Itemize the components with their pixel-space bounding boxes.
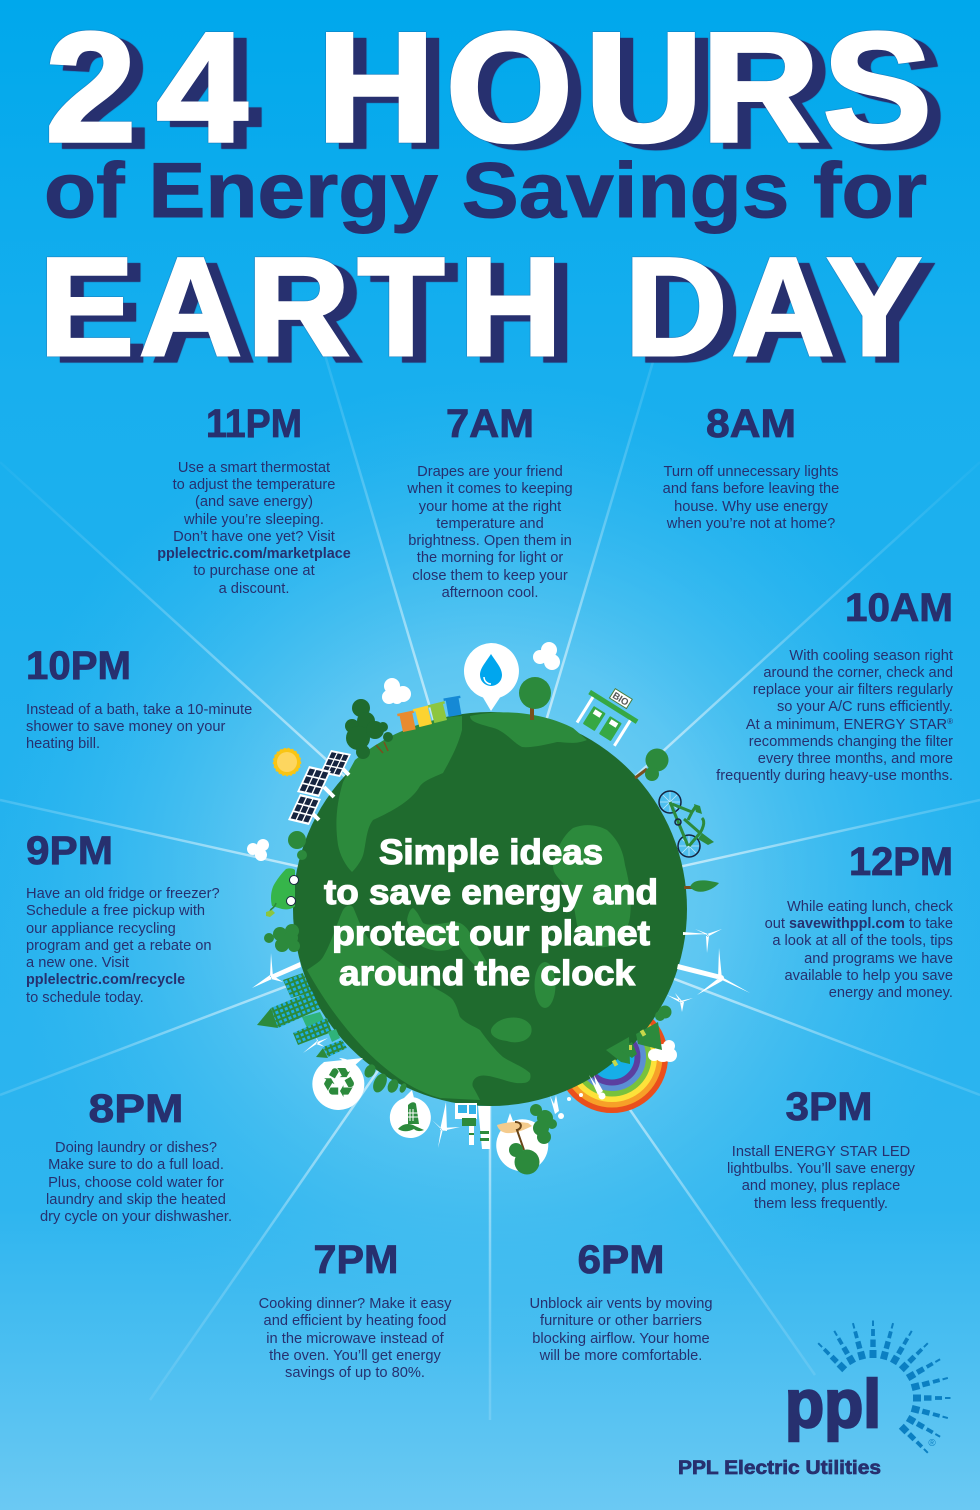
globe headline: Simple ideas [379,833,603,872]
tip: 10AM [716,586,954,784]
tip: 7AM: afternoon cool. [442,585,538,601]
tip: 9PM: a new one. Visit [26,955,129,971]
tip: 3PM: lightbulbs. You’ll save energy [727,1161,916,1177]
tip: 10AM: recommends changing the filter [749,734,953,750]
tip: 7AM: when it comes to keeping [406,481,573,497]
logo wordmark: ppl [785,1366,881,1442]
tip: 11PM: a discount. [219,581,289,597]
tip: 9PM: to schedule today. [26,990,144,1006]
tip: 7AM: Drapes are your friend [417,464,563,480]
tip: 7PM [259,1238,452,1381]
title line: 24 HOURS: 24 HOURS [45,0,932,174]
tip: 9PM: pplelectric.com/recycle [26,972,185,988]
tip: 10PM: 10PM [26,644,131,688]
tip: 12PM: and programs we have [804,951,953,967]
tip: 12PM: 12PM [849,840,953,884]
icon: recycle bubble [312,1058,364,1110]
tip: 6PM: furniture or other barriers [540,1313,702,1329]
tip: 7PM: in the microwave instead of [266,1331,445,1347]
tip: 9PM: Schedule a free pickup with [26,903,205,919]
tip: 9PM: Have an old fridge or freezer? [26,886,220,902]
tip: 9PM: our appliance recycling [26,921,176,937]
title line: of Energy Savings for: of Energy Savings for [44,146,927,234]
tip: 11PM: pplelectric.com/marketplace [157,546,351,562]
sun rays [0,355,980,1420]
globe headline: to save energy and [324,873,658,912]
tip: 11PM: to purchase one at [193,563,315,579]
tip: 8PM: Plus, choose cold water for [48,1175,224,1191]
tip: 7PM: and efficient by heating food [264,1313,446,1329]
icon: electric car [266,868,298,917]
icon: dark tree cluster [345,699,393,759]
tip: 8PM [40,1087,232,1225]
islands [491,962,556,1042]
tip: 10PM: Instead of a bath, take a 10-minute [26,702,252,718]
title line: EARTH DAY: EARTH DAY [39,228,922,385]
icon: factory [455,1103,490,1149]
tip: 3PM: them less frequently. [754,1196,888,1212]
tip: 6PM: 6PM [578,1238,664,1282]
tip: 6PM: Unblock air vents by moving [529,1296,713,1312]
tip: 7AM: brightness. Open them in [408,533,572,549]
icon: tree [519,677,551,720]
tip: 8AM [663,402,839,532]
tip: 11PM: (and save energy) [195,494,313,510]
tip: 7AM: 7AM [446,402,534,446]
logo sunburst [816,1320,950,1455]
icon: solar panels [288,750,351,825]
icon: leaf [684,880,719,892]
tip: 7PM: the oven. You’ll get energy [269,1348,442,1364]
icon: water bubble [464,643,519,711]
globe headline [324,833,658,993]
logo: PPL Electric Utilities [678,1320,950,1479]
tip: 7AM: your home at the right [419,499,561,515]
tip: 10PM [26,644,252,752]
tip: 12PM: While eating lunch, check [787,899,954,915]
tip: 12PM [765,840,954,1001]
icon: wind turbines east [667,929,750,1012]
tip: 10AM: so your A/C runs efficiently. [777,699,953,715]
icon: recycle bubble: ♻ [321,1059,357,1107]
icon: wind turbines west [252,953,328,1053]
tip: 3PM: 3PM [786,1085,872,1129]
tip: 12PM: a look at all of the tools, tips [772,933,953,949]
tip: 8AM: house. Why use energy [674,499,829,515]
tip: 8AM: and fans before leaving the [663,481,839,497]
tip: 11PM: 11PM [206,402,302,446]
icon: bulb bubble [390,1090,431,1138]
icon: bio fuel station: BIO [610,690,630,709]
tip: 12PM: available to help you save [785,968,953,984]
tip: 7AM: the morning for light or [417,550,563,566]
title [39,0,932,385]
tip: 7PM: Cooking dinner? Make it easy [259,1296,452,1312]
logo caption: PPL Electric Utilities [678,1458,881,1479]
tip: 8PM: dry cycle on your dishwasher. [40,1209,232,1225]
tip: 12PM: energy and money. [829,985,953,1001]
tip: 8PM: laundry and skip the heated [46,1192,226,1208]
tip: 11PM: to adjust the temperature [173,477,335,493]
tip: 7PM: 7PM [314,1238,398,1282]
tip: 8PM: Doing laundry or dishes? [55,1140,217,1156]
tip: 11PM: Use a smart thermostat [178,460,330,476]
icon: small trees west [288,831,307,860]
continent: north [470,712,587,747]
icon: leaves [362,1062,408,1095]
tip: 8PM: 8PM [88,1087,184,1131]
tip: 8AM: when you’re not at home? [666,516,835,532]
tip: 8AM: 8AM [706,402,796,446]
tip: 10AM: frequently during heavy-use months. [716,768,953,784]
rainbow [559,1004,665,1110]
tip: 10AM: At a minimum, ENERGY STAR [746,717,947,733]
tip: 11PM [157,402,351,597]
tip: 10AM: With cooling season right [789,648,953,664]
tip: 6PM: blocking airflow. Your home [532,1331,710,1347]
tip: 12PM: out savewithppl.com to take [765,916,953,932]
icon: pine trees on rainbow [606,1006,672,1067]
tip: 10AM: every three months, and more [758,751,953,767]
icon: bio fuel station [572,678,646,749]
tip: 3PM: and money, plus replace [742,1178,900,1194]
tip: 9PM: 9PM [26,829,113,873]
icon: clouds [247,642,677,1062]
tip: 10AM: ® [947,717,953,726]
tip: 10AM: around the corner, check and [763,665,953,681]
icon: bicycle [659,791,714,857]
tip: 10PM: heating bill. [26,736,100,752]
tip: 6PM: will be more comfortable. [539,1348,702,1364]
tip: 7PM: savings of up to 80%. [285,1365,425,1381]
tip: 9PM: program and get a rebate on [26,938,212,954]
tip: 7AM: close them to keep your [412,568,568,584]
tip: 11PM: while you’re sleeping. [183,512,324,528]
continent: east [553,825,631,947]
icon: recycling bins [397,696,463,732]
tip: 7AM: temperature and [436,516,544,532]
tip: 10AM: replace your air filters regularly [753,682,954,698]
tip: 6PM [529,1238,713,1364]
tip: 8AM: Turn off unnecessary lights [664,464,838,480]
tip: 7AM [406,402,573,601]
continent: central [407,908,487,968]
icon: tree cluster west [264,924,300,952]
tip: 9PM [26,829,220,1006]
icon: green buildings [257,973,347,1058]
tip: 8PM: Make sure to do a full load. [48,1157,224,1173]
icon: hand bubble [496,1113,548,1171]
continent: north west [336,716,462,872]
icon: tree east [635,748,668,781]
globe headline: protect our planet [332,914,650,953]
tip: 10AM: 10AM [845,586,953,630]
registered mark: ® [928,1438,936,1449]
icon: trees by bubble [509,1104,557,1174]
globe headline: around the clock [339,954,636,993]
tip: 3PM: Install ENERGY STAR LED [732,1144,910,1160]
tip: 11PM: Don’t have one yet? Visit [173,529,335,545]
icon: rabbits [550,1075,606,1119]
continent: south west [307,905,531,1100]
icon: sun [274,748,300,776]
globe [293,712,687,1106]
tip: 10PM: shower to save money on your [26,719,226,735]
icon: wind turbine south [432,1102,460,1148]
tip: 3PM [727,1085,916,1212]
